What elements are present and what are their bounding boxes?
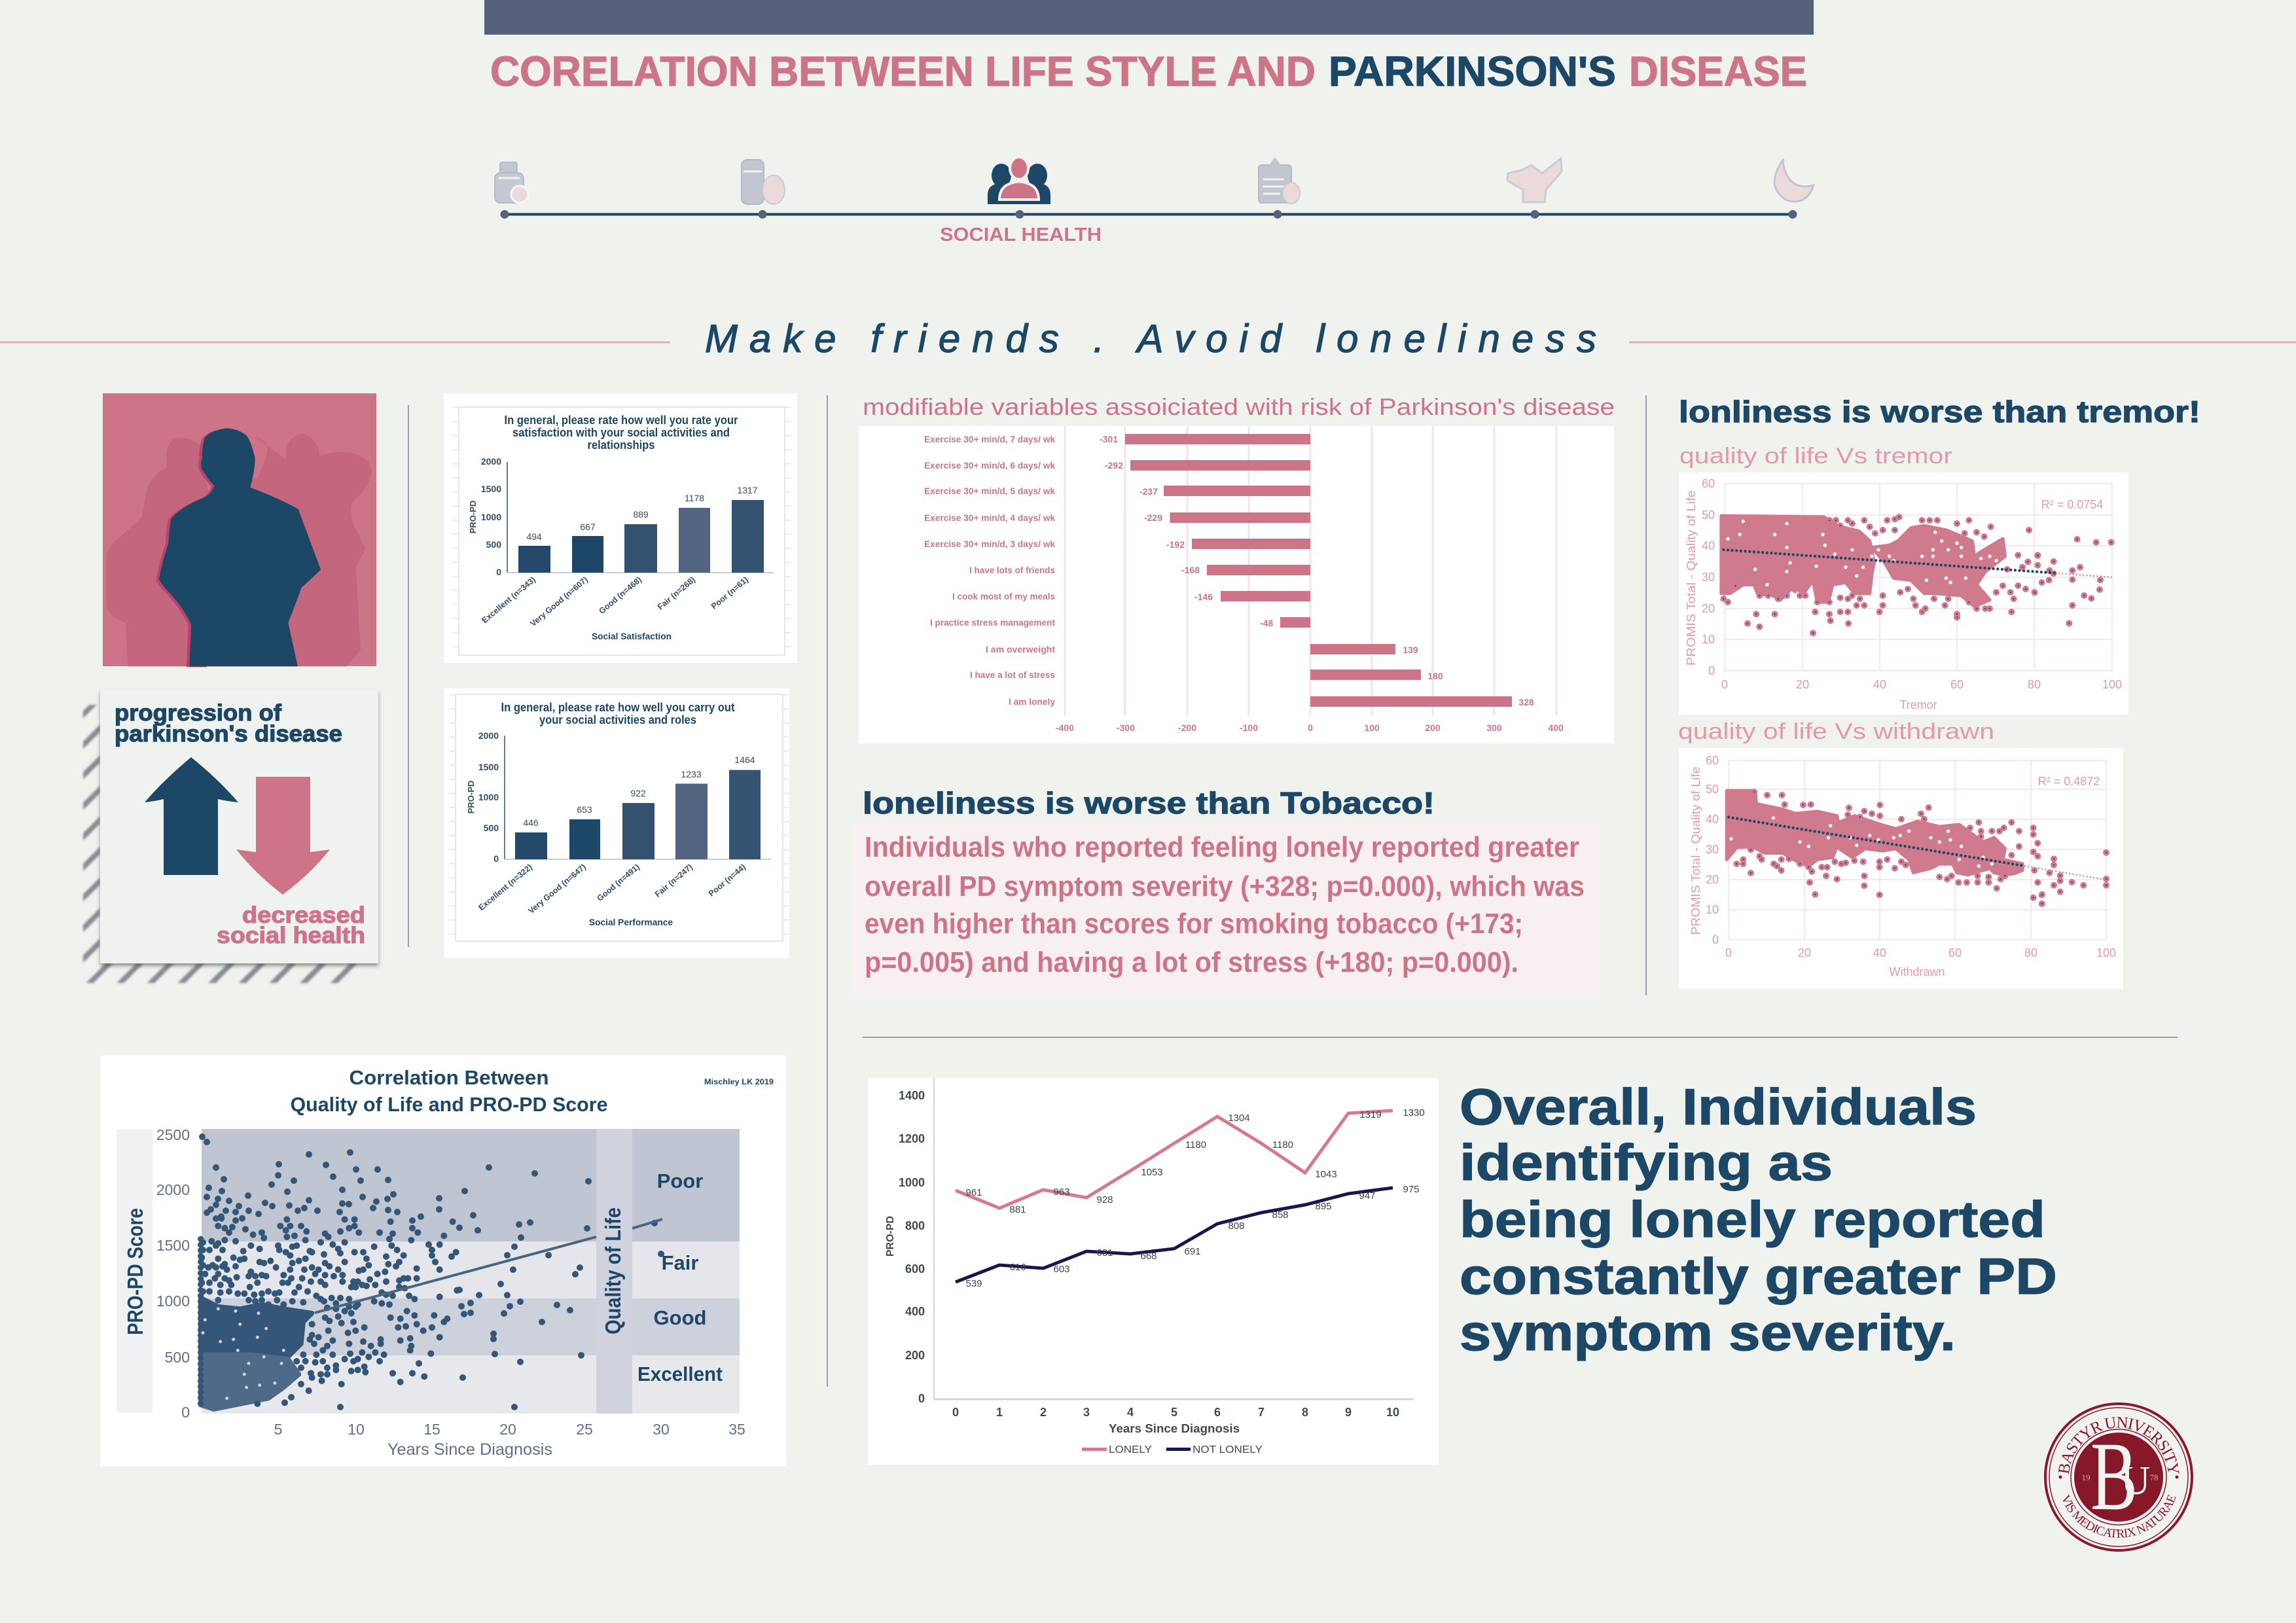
diverging bar chart heading: modifiable variables assoiciated with risk of Parkinson's disease bbox=[863, 393, 1615, 420]
icon: hand with heart bbox=[1507, 158, 1562, 202]
chart title: Quality of Life and PRO-PD Score bbox=[291, 1093, 607, 1116]
y axis: 200 bbox=[905, 1349, 925, 1362]
bar values: -192 bbox=[1166, 539, 1185, 550]
categories: Good (n=491) bbox=[595, 863, 641, 903]
x axis: -300 bbox=[1117, 722, 1135, 733]
scatter chart: quality of life vs withdrawn bbox=[1679, 748, 2123, 989]
row labels: I am overweight bbox=[986, 644, 1055, 654]
striped backing behind card bbox=[83, 705, 361, 983]
chart title bbox=[504, 414, 738, 452]
title: PARKINSON'S bbox=[1329, 48, 1616, 95]
axes: 50 bbox=[1702, 508, 1715, 522]
title: CORELATION BETWEEN LIFE STYLE AND bbox=[490, 48, 1316, 95]
heading: lonliness is worse than tremor: lonliness is worse than tremor! bbox=[1679, 395, 2200, 429]
x axis: 30 bbox=[653, 1421, 670, 1438]
y axis: 2500 bbox=[156, 1126, 190, 1143]
axes: 10 bbox=[1702, 633, 1715, 646]
icon: medicine bottle bbox=[495, 162, 528, 203]
logo: Bastyr University seal: VIS MEDICATRIX NATURAE bbox=[2063, 1494, 2176, 1538]
y axis: PRO-PD bbox=[466, 781, 476, 813]
bar values: 1317 bbox=[737, 485, 758, 495]
card: progression vs social health bbox=[100, 690, 378, 963]
bar values: 1233 bbox=[681, 769, 702, 779]
timeline axis bbox=[500, 210, 1797, 219]
logo: Bastyr University seal: B bbox=[2090, 1422, 2138, 1531]
x axis: Years Since Diagnosis bbox=[387, 1440, 552, 1459]
axes: 40 bbox=[1706, 813, 1719, 826]
chart title: relationships bbox=[588, 438, 655, 452]
series: lonely bbox=[956, 1111, 1393, 1208]
bars bbox=[518, 500, 764, 573]
y axis: 0 bbox=[496, 567, 501, 577]
x axis: 25 bbox=[576, 1421, 593, 1438]
categories: Excellent (n=343) bbox=[480, 575, 537, 625]
axes: PROMIS Total - Quality of Life bbox=[1689, 767, 1702, 935]
logo: Bastyr University seal: 19 bbox=[2081, 1472, 2090, 1482]
y axis bbox=[466, 730, 499, 864]
x axis: 4 bbox=[1127, 1406, 1134, 1419]
row labels: Exercise 30+ min/d, 7 days/ wk bbox=[924, 434, 1055, 444]
axes: 100 bbox=[2096, 946, 2116, 959]
line chart: PRO-PD over years since diagnosis bbox=[868, 1078, 1439, 1465]
x axis: 1 bbox=[996, 1406, 1003, 1419]
y axis: 0 bbox=[181, 1404, 190, 1421]
categories: Fair (n=247) bbox=[653, 863, 694, 899]
bar values: 889 bbox=[633, 509, 649, 520]
bar values: 494 bbox=[526, 531, 542, 542]
axes: 20 bbox=[1798, 946, 1811, 959]
x axis: 20 bbox=[499, 1421, 516, 1438]
bar values: -168 bbox=[1181, 565, 1200, 575]
photo panel: silhouette of a lonely person bbox=[103, 393, 376, 667]
legend: NOT LONELY bbox=[1193, 1444, 1263, 1455]
axes bbox=[1689, 754, 2116, 978]
categories bbox=[480, 575, 750, 628]
trend line bbox=[315, 1219, 662, 1313]
y axis: 2000 bbox=[156, 1181, 190, 1198]
categories: Very Good (n=647) bbox=[527, 863, 588, 916]
arrow: up bbox=[145, 757, 238, 875]
row labels: I have lots of friends bbox=[969, 565, 1055, 575]
y axis bbox=[468, 456, 501, 577]
categories: Poor (n=61) bbox=[709, 575, 750, 611]
y axis: 1000 bbox=[899, 1176, 925, 1189]
y axis: 1000 bbox=[481, 512, 501, 522]
data labels: 961 bbox=[965, 1187, 982, 1198]
conclusion text: symptom severity. bbox=[1460, 1304, 1956, 1361]
x axis: 10 bbox=[1386, 1406, 1399, 1419]
y axis: 500 bbox=[486, 539, 501, 550]
timeline navigation bbox=[495, 157, 1814, 245]
callout: loneliness text: even higher than scores for smoking tobacco (+173; bbox=[865, 908, 1523, 940]
y axis: 400 bbox=[905, 1305, 925, 1318]
axes: R² = 0.4872 bbox=[2038, 775, 2100, 788]
y axis: 1500 bbox=[478, 762, 499, 772]
conclusion text: identifying as bbox=[1460, 1133, 1833, 1191]
diverging bar chart: modifiable variables bbox=[859, 426, 1614, 743]
bar values: 922 bbox=[630, 788, 646, 798]
categories: Good (n=468) bbox=[597, 575, 643, 616]
scatter chart: quality of life vs tremor bbox=[1679, 473, 2128, 715]
bar values: -292 bbox=[1105, 460, 1123, 471]
x axis: 5 bbox=[274, 1421, 282, 1438]
axes: 60 bbox=[1948, 946, 1962, 959]
y axis: 1000 bbox=[478, 792, 499, 802]
chart title: In general, please rate how well you carry out bbox=[501, 701, 735, 714]
data labels: 1180 bbox=[1272, 1139, 1293, 1150]
section heading bbox=[0, 317, 2296, 361]
text: progression of parkinson's disease: progression of bbox=[115, 700, 281, 726]
y axis: 0 bbox=[493, 853, 499, 864]
data labels: 808 bbox=[1228, 1221, 1245, 1232]
x axis: 8 bbox=[1302, 1406, 1308, 1419]
x axis: 35 bbox=[728, 1421, 745, 1438]
row labels: Exercise 30+ min/d, 4 days/ wk bbox=[924, 512, 1055, 523]
text: decreased social health: decreased bbox=[242, 902, 365, 928]
bar values: 139 bbox=[1403, 645, 1418, 655]
icon: social health people bbox=[988, 157, 1050, 204]
bar values: 653 bbox=[577, 804, 592, 815]
axes: 0 bbox=[1708, 664, 1715, 677]
axes bbox=[1685, 477, 2122, 711]
data labels: 1180 bbox=[1185, 1139, 1206, 1150]
x axis: 0 bbox=[952, 1406, 959, 1419]
heading: quality of life vs withdrawn: quality of life Vs withdrawn bbox=[1678, 719, 1994, 744]
x axis: -200 bbox=[1178, 722, 1196, 733]
categories bbox=[476, 863, 747, 916]
row labels: Exercise 30+ min/d, 6 days/ wk bbox=[924, 460, 1055, 471]
y axis: 1500 bbox=[156, 1237, 190, 1254]
icon: can and apple bbox=[742, 160, 785, 204]
bar values: 667 bbox=[580, 522, 596, 532]
x axis bbox=[274, 1421, 745, 1459]
text: decreased social health: social health bbox=[217, 923, 365, 948]
callout: loneliness text: p=0.005) and having a lot of stress (+180; p=0.000). bbox=[865, 946, 1518, 978]
conclusion text bbox=[1460, 1078, 2057, 1361]
chart title: satisfaction with your social activities and bbox=[512, 426, 730, 439]
x axis: 10 bbox=[348, 1421, 365, 1438]
y axis: 1500 bbox=[481, 484, 501, 494]
x axis: 15 bbox=[423, 1421, 440, 1438]
data labels: 681 bbox=[1096, 1247, 1113, 1258]
scatter chart: quality of life and PRO-PD score bbox=[100, 1056, 786, 1467]
row labels bbox=[924, 434, 1055, 707]
axes: 30 bbox=[1702, 571, 1715, 584]
y axis: 800 bbox=[905, 1219, 925, 1232]
bars bbox=[515, 770, 761, 859]
x axis: 3 bbox=[1083, 1406, 1090, 1419]
data labels: 947 bbox=[1359, 1190, 1376, 1202]
bar values: 1178 bbox=[685, 493, 704, 503]
text: progression of parkinson's disease bbox=[115, 700, 342, 747]
text: progression of parkinson's disease: parkinson's disease bbox=[115, 721, 342, 747]
categories: Very Good (n=607) bbox=[529, 575, 590, 628]
data labels: 1304 bbox=[1228, 1113, 1250, 1124]
data labels: 691 bbox=[1184, 1246, 1201, 1257]
axes: 60 bbox=[1950, 678, 1964, 691]
section heading: Make friends . Avoid loneliness bbox=[705, 317, 1596, 361]
x axis: 0 bbox=[1308, 722, 1313, 733]
data labels: 858 bbox=[1272, 1209, 1289, 1221]
x axis bbox=[952, 1406, 1399, 1435]
chart title bbox=[501, 701, 735, 726]
data labels: 881 bbox=[1009, 1204, 1026, 1215]
logo: Bastyr University seal: U bbox=[2121, 1459, 2150, 1503]
bar values: -48 bbox=[1260, 618, 1273, 628]
logo: Bastyr University seal: BASTYR UNIVERSITY bbox=[2058, 1417, 2179, 1474]
y axis: 2000 bbox=[481, 456, 501, 467]
x axis: 7 bbox=[1258, 1406, 1265, 1419]
top banner bar bbox=[484, 0, 1814, 35]
chart title: In general, please rate how well you rate your bbox=[504, 414, 738, 427]
axes: 80 bbox=[2028, 678, 2041, 691]
y axis: 0 bbox=[918, 1392, 925, 1405]
quality bands bbox=[117, 1129, 740, 1414]
axes: 40 bbox=[1702, 539, 1715, 552]
conclusion text: being lonely reported bbox=[1460, 1190, 2045, 1248]
axes: 60 bbox=[1702, 477, 1715, 490]
chart title: Correlation Between bbox=[350, 1066, 548, 1089]
y axis: 1000 bbox=[156, 1293, 190, 1310]
chart title: your social activities and roles bbox=[539, 713, 696, 726]
data labels: 1330 bbox=[1403, 1107, 1425, 1118]
scatter points bbox=[201, 1137, 661, 1409]
data labels: 616 bbox=[1009, 1262, 1026, 1273]
text: decreased social health bbox=[217, 902, 365, 948]
x axis bbox=[1056, 722, 1564, 733]
quality of life labels: Excellent bbox=[637, 1363, 723, 1385]
bar values: -229 bbox=[1144, 512, 1162, 523]
x axis title: Social Performance bbox=[589, 917, 673, 927]
x axis: -100 bbox=[1240, 722, 1258, 733]
axes: PROMIS Total - Quality of Life bbox=[1685, 490, 1698, 666]
axes: 20 bbox=[1702, 602, 1715, 615]
data labels bbox=[965, 1107, 1425, 1289]
data labels: 975 bbox=[1403, 1184, 1420, 1195]
bar values: -301 bbox=[1100, 434, 1118, 444]
arrow: down bbox=[236, 777, 330, 895]
heading: loneliness is worse than tobacco: loneliness is worse than Tobacco! bbox=[863, 786, 1435, 820]
y axis bbox=[123, 1126, 190, 1421]
x axis: 6 bbox=[1214, 1406, 1221, 1419]
bar values: 180 bbox=[1427, 671, 1443, 681]
y axis: PRO-PD bbox=[885, 1216, 896, 1257]
axes: 30 bbox=[1706, 843, 1719, 856]
bar values: -237 bbox=[1139, 486, 1158, 497]
row labels: I have a lot of stress bbox=[970, 669, 1055, 680]
callout: loneliness text: overall PD symptom severity (+328; p=0.000), which was bbox=[865, 870, 1585, 902]
data labels: 603 bbox=[1053, 1264, 1070, 1275]
y axis: 600 bbox=[905, 1262, 925, 1275]
x axis: 400 bbox=[1548, 722, 1564, 733]
x axis: Years Since Diagnosis bbox=[1109, 1422, 1240, 1435]
icon: clipboard bbox=[1259, 157, 1300, 204]
row labels: Exercise 30+ min/d, 3 days/ wk bbox=[924, 539, 1055, 549]
axes: R² = 0.0754 bbox=[2041, 498, 2103, 511]
bar values bbox=[1100, 434, 1534, 707]
legend: LONELY bbox=[1109, 1444, 1152, 1455]
title bbox=[490, 48, 1807, 95]
axes: 0 bbox=[1712, 933, 1719, 946]
bar chart: social satisfaction bbox=[444, 393, 797, 663]
main silhouette bbox=[159, 428, 321, 666]
axes: 40 bbox=[1873, 946, 1886, 959]
timeline label: social health: SOCIAL HEALTH bbox=[940, 224, 1102, 245]
y axis: PRO-PD bbox=[468, 501, 478, 533]
axes: 20 bbox=[1796, 678, 1809, 691]
callout: loneliness text bbox=[852, 824, 1599, 994]
categories: Poor (n=44) bbox=[707, 863, 747, 899]
quality of life labels: Fair bbox=[662, 1251, 698, 1274]
data labels: 1319 bbox=[1359, 1109, 1382, 1120]
conclusion text: constantly greater PD bbox=[1460, 1247, 2057, 1305]
logo: Bastyr University seal bbox=[2044, 1402, 2193, 1552]
row labels: I am lonely bbox=[1009, 696, 1055, 707]
data labels: 895 bbox=[1315, 1201, 1332, 1212]
data labels: 963 bbox=[1053, 1186, 1070, 1198]
x axis: 2 bbox=[1040, 1406, 1047, 1419]
categories: Fair (n=268) bbox=[656, 575, 697, 612]
axes: 80 bbox=[2024, 946, 2037, 959]
icon: moon bbox=[1774, 159, 1814, 202]
conclusion text: Overall, Individuals bbox=[1460, 1078, 1977, 1135]
x axis: 200 bbox=[1425, 722, 1441, 733]
row labels: Exercise 30+ min/d, 5 days/ wk bbox=[924, 486, 1055, 496]
quality of life labels bbox=[601, 1169, 723, 1385]
series: not lonely bbox=[956, 1188, 1393, 1282]
data labels: 1043 bbox=[1315, 1169, 1337, 1180]
quality of life labels: Poor bbox=[657, 1169, 703, 1192]
y axis: PRO-PD Score bbox=[123, 1208, 147, 1335]
bar chart: social performance bbox=[444, 688, 789, 958]
row labels: I cook most of my meals bbox=[952, 591, 1055, 601]
data labels: 1053 bbox=[1141, 1167, 1163, 1178]
heading: quality of life vs tremor: quality of life Vs tremor bbox=[1679, 444, 1952, 469]
bar values bbox=[526, 485, 758, 542]
quality of life labels: Good bbox=[654, 1306, 706, 1329]
x axis: 9 bbox=[1345, 1406, 1352, 1419]
x axis title: Social Satisfaction bbox=[592, 631, 672, 641]
bar values: 328 bbox=[1518, 697, 1534, 707]
x axis: 100 bbox=[1364, 722, 1380, 733]
axes: 20 bbox=[1706, 873, 1719, 886]
points and trend bbox=[1721, 516, 2112, 633]
data labels: 668 bbox=[1140, 1251, 1157, 1262]
quality of life labels: Quality of Life bbox=[601, 1207, 625, 1334]
row labels: I practice stress management bbox=[930, 617, 1055, 628]
axes: 60 bbox=[1706, 754, 1719, 767]
bars bbox=[1125, 434, 1512, 707]
x axis: -400 bbox=[1056, 722, 1074, 733]
bar values bbox=[523, 755, 755, 828]
axes: 10 bbox=[1706, 903, 1719, 916]
title: DISEASE bbox=[1629, 48, 1807, 95]
bar values: 446 bbox=[523, 817, 539, 828]
axes: 0 bbox=[1721, 678, 1728, 691]
axes: 100 bbox=[2102, 678, 2122, 691]
chart title bbox=[291, 1066, 607, 1116]
y axis: 500 bbox=[484, 823, 499, 833]
logo: Bastyr University seal: 78 bbox=[2149, 1472, 2159, 1482]
data labels: 539 bbox=[965, 1278, 982, 1289]
axes: 40 bbox=[1873, 678, 1886, 691]
axes: 0 bbox=[1725, 946, 1732, 959]
axes: 50 bbox=[1706, 783, 1719, 796]
callout: loneliness text: Individuals who reported feeling lonely reported greater bbox=[865, 831, 1579, 863]
y axis: 1400 bbox=[899, 1089, 925, 1102]
bar values: -146 bbox=[1194, 592, 1213, 602]
y axis bbox=[885, 1089, 925, 1405]
x axis: 300 bbox=[1486, 722, 1502, 733]
data labels: 928 bbox=[1096, 1194, 1113, 1205]
legend bbox=[1082, 1444, 1263, 1455]
background crowd silhouettes bbox=[106, 434, 371, 666]
axes: Tremor bbox=[1899, 698, 1937, 711]
x axis: 5 bbox=[1171, 1406, 1177, 1419]
y axis: 1200 bbox=[899, 1132, 925, 1145]
bar values: 1464 bbox=[734, 755, 755, 765]
categories: Excellent (n=322) bbox=[476, 863, 534, 912]
y axis: 500 bbox=[165, 1349, 190, 1366]
citation: Mischley LK 2019 bbox=[704, 1077, 774, 1086]
points and trend bbox=[1727, 791, 2106, 904]
y axis: 2000 bbox=[478, 730, 499, 741]
axes: Withdrawn bbox=[1889, 965, 1945, 978]
